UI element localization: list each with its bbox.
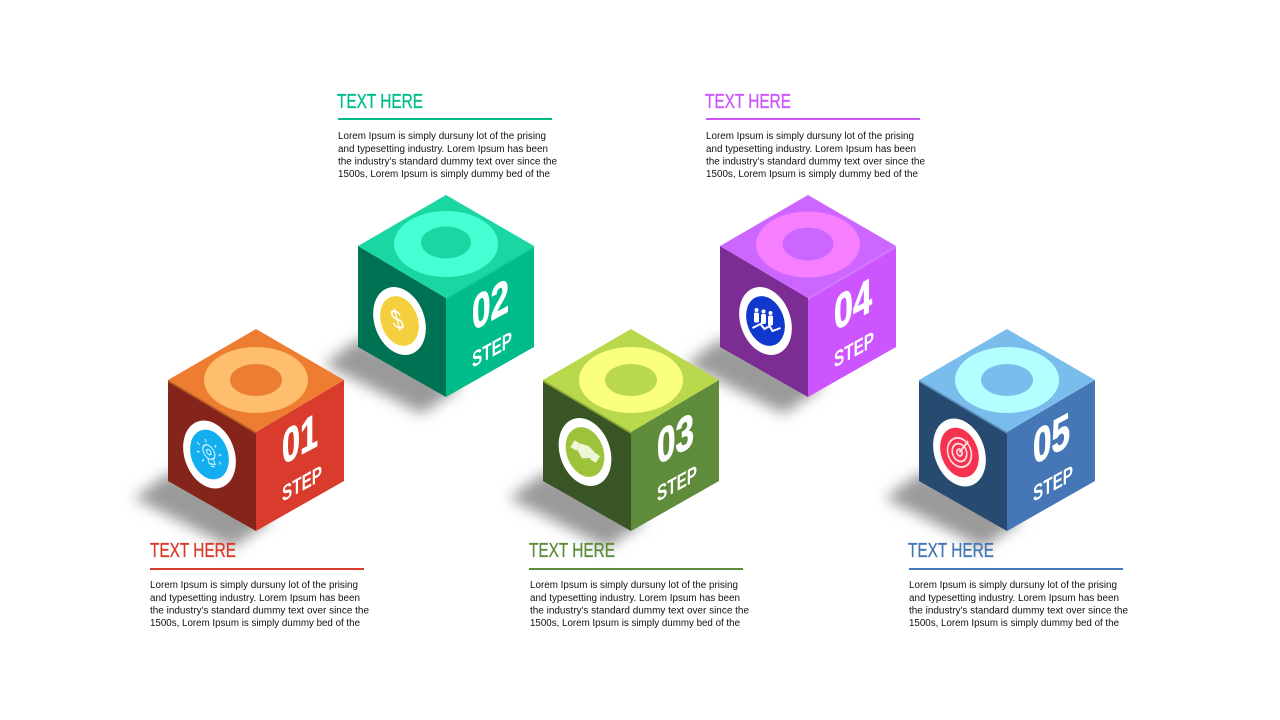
body text: Lorem Ipsum is simply dursuny lot of the prising: [909, 580, 1117, 591]
body text: the industry's standard dummy text over since the: [530, 606, 749, 616]
body text: 1500s, Lorem Ipsum is simply dummy bed of the: [909, 618, 1119, 629]
body text: Lorem Ipsum is simply dursuny lot of the prising: [338, 131, 546, 142]
body text: Lorem Ipsum is simply dursuny lot of the prising: [706, 131, 914, 142]
body text: Lorem Ipsum is simply dursuny lot of the prising: [530, 580, 738, 591]
step label: STEP: [657, 461, 697, 508]
body text: [150, 580, 369, 629]
step label: STEP: [1033, 461, 1073, 508]
heading: TEXT HERE: [705, 91, 791, 113]
step label: STEP: [282, 461, 322, 508]
heading: TEXT HERE: [337, 91, 423, 113]
heading: TEXT HERE: [529, 540, 615, 562]
icon: dollar coin: [364, 280, 435, 362]
step number 04: 04: [834, 266, 872, 341]
text block: step 05: [908, 540, 1128, 629]
body text: [530, 580, 749, 629]
text block: step 02: [337, 91, 557, 180]
icon: light bulb: [174, 413, 245, 496]
body text: 1500s, Lorem Ipsum is simply dummy bed of the: [338, 169, 550, 180]
body text: [706, 131, 925, 180]
shadow: cube 03: [509, 472, 647, 548]
step label: STEP: [472, 327, 512, 374]
shadow: cube 04: [686, 338, 824, 414]
body text: and typesetting industry. Lorem Ipsum has been: [150, 593, 360, 604]
body text: and typesetting industry. Lorem Ipsum has been: [909, 593, 1119, 604]
body text: the industry's standard dummy text over since the: [338, 156, 557, 168]
body text: [338, 131, 557, 180]
shadow: cube 05: [885, 472, 1023, 548]
step number 01: 01: [282, 402, 318, 475]
icon: handshake: [550, 411, 620, 493]
heading: TEXT HERE: [908, 540, 994, 562]
body text: 1500s, Lorem Ipsum is simply dummy bed of the: [150, 618, 360, 629]
text block: step 01: [150, 540, 369, 629]
heading: TEXT HERE: [150, 540, 236, 562]
icon: target: [924, 411, 995, 494]
shadow: cube 01: [134, 472, 272, 548]
body text: and typesetting industry. Lorem Ipsum has been: [706, 144, 916, 155]
body text: [909, 580, 1128, 629]
cube: step 04: [720, 195, 896, 397]
cube: step 03: [543, 329, 719, 531]
body text: 1500s, Lorem Ipsum is simply dummy bed of the: [706, 169, 918, 180]
step number 05: 05: [1033, 401, 1070, 475]
body text: Lorem Ipsum is simply dursuny lot of the prising: [150, 580, 358, 591]
shadow: cube 02: [324, 338, 462, 414]
step number 03: 03: [657, 401, 694, 475]
cube: step 02: [358, 195, 534, 397]
icon: dollar coin: $: [387, 304, 407, 337]
body text: and typesetting industry. Lorem Ipsum has been: [530, 593, 740, 604]
text block: step 03: [529, 540, 749, 629]
body text: the industry's standard dummy text over since the: [150, 606, 369, 616]
step label: STEP: [834, 327, 874, 374]
body text: the industry's standard dummy text over since the: [706, 156, 925, 168]
body text: and typesetting industry. Lorem Ipsum has been: [338, 144, 548, 155]
step number 02: 02: [472, 267, 509, 341]
text block: step 04: [705, 91, 925, 180]
cube: step 01: [168, 329, 344, 531]
icon: team climbing: [730, 280, 801, 362]
cube: step 05: [919, 329, 1095, 531]
body text: the industry's standard dummy text over since the: [909, 606, 1128, 616]
body text: 1500s, Lorem Ipsum is simply dummy bed of the: [530, 618, 740, 629]
